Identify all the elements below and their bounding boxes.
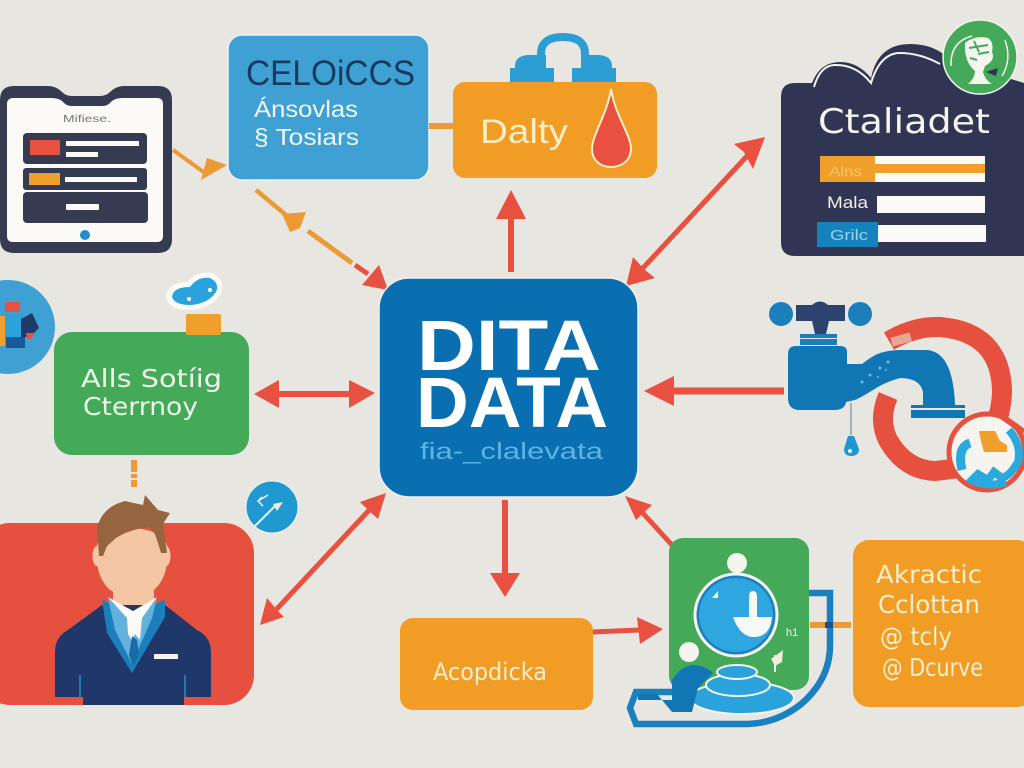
person neck [113,580,154,618]
panel: ctaliadet [781,44,1024,256]
row: mala [827,193,985,213]
dashes: green panel to person [131,460,137,487]
subtitle: fia-_clalevata [420,438,603,464]
panel: water gauge [630,538,830,724]
arrow: centre to acopdicka [490,500,520,597]
gear circle [949,414,1024,490]
heading: celoiccs: CELOiCCS [246,54,415,93]
icon: green tree badge [943,20,1017,94]
icon: clamp handle [510,37,616,82]
row: alins [820,156,985,182]
row: grile [817,222,986,247]
text: cterrnoy: Cterrnoy [83,392,198,421]
tablet home button [80,230,90,240]
icon: orange tab [186,314,221,335]
panel: acopdicka [400,618,593,710]
icon: red drop [592,89,631,167]
heading: ctaliadet: Ctaliadet [818,102,990,142]
tablet caption: Mifiese. [63,113,111,125]
panel: green software [54,332,249,455]
text: acopdicka: Acopdicka [433,658,547,686]
text: dalty: Dalty [480,113,568,151]
text: tcly: @ tcly [880,622,952,651]
person suit [55,605,211,705]
person hair [97,495,170,556]
panel: celoiccs [228,35,429,180]
heading: dita: DITA [417,307,601,386]
arrow: tablet to blue panel [173,150,227,180]
faucet handle [769,302,872,334]
connector: blue panel to orange panel [429,123,454,129]
connector: gauge to orange panel [810,622,851,628]
icon: blue cloud [166,273,222,310]
tablet row 1 [23,133,147,164]
water drip [844,403,859,456]
row: alins: Alns [829,163,862,179]
arrow: acopdicka to gauge [593,617,663,644]
faucet body [788,346,955,410]
heading: data: DATA [416,364,608,443]
tablet row 2 [23,168,147,190]
text: cclottan: Cclottan [878,590,980,619]
panel: akractic [853,540,1024,707]
arrow: faucet to centre [644,376,784,406]
red loop [889,327,1002,432]
icon: tool circle [246,481,298,533]
arrow: centre to dalty [496,190,526,272]
faucet base [911,405,965,418]
person ears [92,546,170,566]
text: alls softig: Alls Sotíig [81,364,222,393]
dashed arrow: blue panel to centre [256,190,388,290]
tablet row 3 [23,192,148,223]
icon: blocks circle [0,280,55,374]
pipe [630,593,830,724]
panel: central data [379,278,638,497]
person tie [108,597,157,641]
text: dcurve: @ Dcurve [882,653,983,682]
double arrow: green panel to centre [254,380,375,408]
person badge [154,654,178,659]
person head [96,528,168,597]
arrow: centre to lower right [625,496,672,545]
person shirt [102,600,165,673]
double arrow: centre to person [260,493,386,625]
text: ansovlas: Ánsovlas [254,96,358,122]
small circles [679,553,747,662]
icon: faucet with red loop [769,302,1024,490]
faucet collar [800,334,837,345]
gauge mark: h1 [786,627,798,639]
base dome [690,665,794,714]
valve [638,665,713,712]
panel: person [0,495,254,705]
gauge dial [695,574,777,656]
panel: tablet [0,86,172,253]
row: grile: Grilc [830,227,869,244]
double arrow: centre to dark panel [626,137,765,286]
text: akractic: Akractic [876,560,982,589]
panel: dalty [453,82,657,178]
text: tosiars: § Tosiars [254,124,359,150]
row: mala: Mala [827,193,869,212]
